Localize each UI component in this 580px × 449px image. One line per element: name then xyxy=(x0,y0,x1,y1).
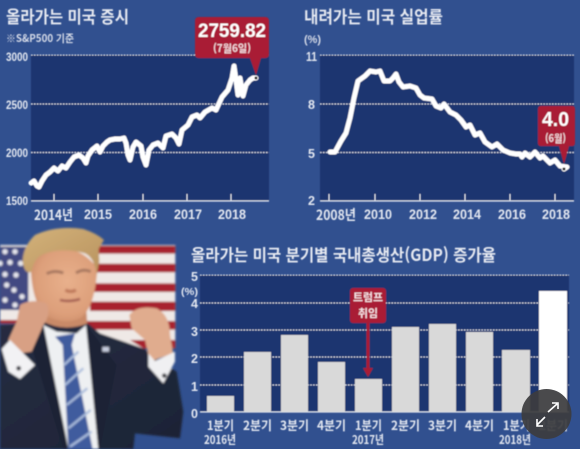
x axis labels: 2018 xyxy=(542,206,570,222)
y axis labels: 8 xyxy=(308,98,315,112)
x axis labels: 2016 xyxy=(498,206,526,222)
y axis labels: 2500 xyxy=(6,98,28,112)
x axis labels: 2017 xyxy=(174,206,202,222)
head xyxy=(31,248,97,321)
note: S&P500 basis: ※S&P500 기준 xyxy=(6,31,74,46)
callout: Trump inauguration: 취임 xyxy=(358,305,378,321)
callout: 2759.82: 2759.82 xyxy=(198,21,266,42)
y axis labels: 0 xyxy=(191,407,198,421)
heading: unemployment: 내려가는 미국 실업률 xyxy=(304,3,443,28)
neck xyxy=(43,305,87,328)
x axis labels: 1분기 xyxy=(207,415,234,434)
y axis labels: 5 xyxy=(191,270,198,284)
y axis labels xyxy=(306,50,317,208)
x axis labels: 2018년 xyxy=(499,431,531,448)
suit xyxy=(0,322,183,449)
x axis labels: 2016 xyxy=(129,206,157,222)
unit: (%) xyxy=(304,34,321,46)
x axis labels xyxy=(34,205,246,225)
chart plot area xyxy=(200,275,569,412)
y axis labels: 3 xyxy=(191,325,198,339)
y axis labels: (%) xyxy=(181,286,198,298)
x axis labels: 1분기 xyxy=(355,415,382,434)
y axis labels: 4 xyxy=(191,297,198,311)
y axis labels: 2 xyxy=(191,352,198,366)
x axis labels: 4분기 xyxy=(317,415,346,434)
panel: S&P500 chart xyxy=(6,3,269,225)
flag xyxy=(0,245,175,348)
x axis labels: 1분기 xyxy=(503,415,530,434)
callout: 2759.82 xyxy=(195,17,269,75)
callout: 4.0: (6월) xyxy=(545,131,566,146)
left fist xyxy=(2,301,49,379)
shirt xyxy=(43,325,98,449)
x axis labels xyxy=(204,415,568,448)
callout: 4.0: 4.0 xyxy=(542,109,569,131)
right fist xyxy=(129,307,175,383)
bars xyxy=(207,291,567,412)
end marker xyxy=(562,168,566,170)
eyes and mouth xyxy=(47,270,91,301)
line: unemployment rate xyxy=(330,71,567,169)
x axis labels: 2015 xyxy=(84,206,112,222)
y axis labels: 1500 xyxy=(6,194,28,208)
chart plot area xyxy=(320,55,574,201)
chart plot area xyxy=(31,55,269,201)
callout: 2759.82: (7월6일) xyxy=(213,41,251,56)
y axis labels: 2000 xyxy=(6,146,28,160)
jacket lapels xyxy=(30,325,117,449)
x axis labels: 4분기 xyxy=(465,415,494,434)
panel: GDP bar chart xyxy=(181,242,569,448)
y axis labels xyxy=(181,270,198,421)
pin xyxy=(102,347,109,352)
x axis labels: 2016년 xyxy=(204,431,236,448)
x axis labels: 2010 xyxy=(364,206,392,222)
y axis labels: 5 xyxy=(308,147,315,161)
y axis labels xyxy=(6,50,28,208)
callout: Trump inauguration xyxy=(350,288,386,377)
x axis labels: 2분기 xyxy=(539,415,568,434)
x axis labels: 2018 xyxy=(218,206,246,222)
end marker xyxy=(254,76,258,80)
tie xyxy=(55,333,93,449)
heading: stock market: 올라가는 미국 증시 xyxy=(6,3,129,28)
x axis labels: 2014년 xyxy=(34,205,73,225)
x axis labels xyxy=(316,205,570,225)
heading: GDP growth: 올라가는 미국 분기별 국내총생산(GDP) 증가율 xyxy=(191,242,496,266)
photo: president in front of flag xyxy=(0,228,183,449)
panel: unemployment chart xyxy=(304,3,575,225)
icon: expand button xyxy=(522,389,572,439)
y axis labels: 3000 xyxy=(6,50,28,64)
callout: 4.0 xyxy=(538,106,575,164)
x axis labels: 3분기 xyxy=(280,415,309,434)
y axis labels: 11 xyxy=(306,50,317,64)
x axis labels: 2분기 xyxy=(391,415,420,434)
x axis labels: 2017년 xyxy=(352,431,384,448)
line: S&P500 index xyxy=(31,66,256,187)
x axis labels: 2012 xyxy=(409,206,437,222)
y axis labels: 1 xyxy=(191,380,198,394)
callout: Trump inauguration: 트럼프 xyxy=(353,289,383,305)
x axis labels: 2008년 xyxy=(316,205,356,225)
x axis labels: 3분기 xyxy=(428,415,457,434)
x axis labels: 2014 xyxy=(453,206,481,222)
hair xyxy=(23,228,104,275)
y axis labels: 2 xyxy=(308,194,315,208)
x axis labels: 2분기 xyxy=(243,415,272,434)
